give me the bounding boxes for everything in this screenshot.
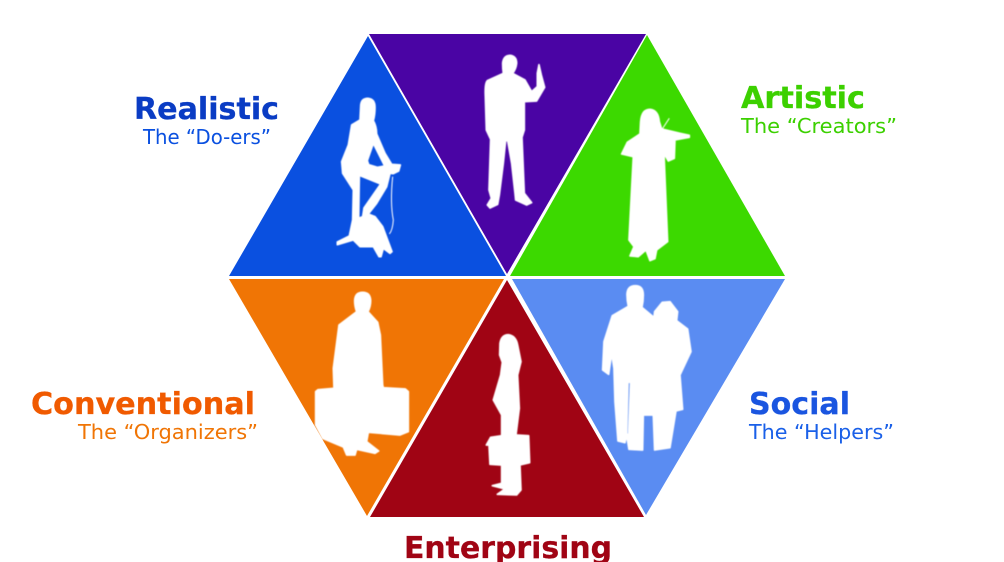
label: Conventional	[31, 387, 258, 444]
icon: violinist silhouette	[622, 109, 689, 261]
panel: conventional triangle	[229, 279, 504, 516]
label: Conventional: The “Organizers”	[77, 420, 258, 444]
hexagon diagram	[229, 34, 785, 517]
panel: enterprising triangle	[370, 280, 644, 517]
panel: artistic triangle	[510, 35, 785, 276]
label: Conventional: Conventional	[31, 387, 255, 422]
icon: businesswoman with briefcase	[486, 335, 530, 495]
label: Realistic: The “Do-ers”	[142, 125, 271, 149]
label: Social: The “Helpers”	[748, 420, 894, 444]
icon: couple walking	[603, 286, 691, 450]
label: Social	[748, 387, 894, 444]
label: Realistic	[134, 92, 279, 149]
icon: conductor silhouette	[485, 55, 545, 208]
label: Artistic	[740, 81, 897, 138]
label: Artistic: The “Creators”	[740, 114, 897, 138]
label: Artistic: Artistic	[741, 81, 865, 116]
icon: person on exercise bike	[337, 98, 400, 257]
panel: realistic triangle	[229, 36, 506, 276]
panel: social triangle	[512, 279, 785, 515]
icon: traveller with suitcases	[316, 292, 408, 455]
panel: investigative triangle	[369, 34, 646, 274]
label: Social: Social	[749, 387, 850, 422]
label: Realistic: Realistic	[134, 92, 279, 127]
